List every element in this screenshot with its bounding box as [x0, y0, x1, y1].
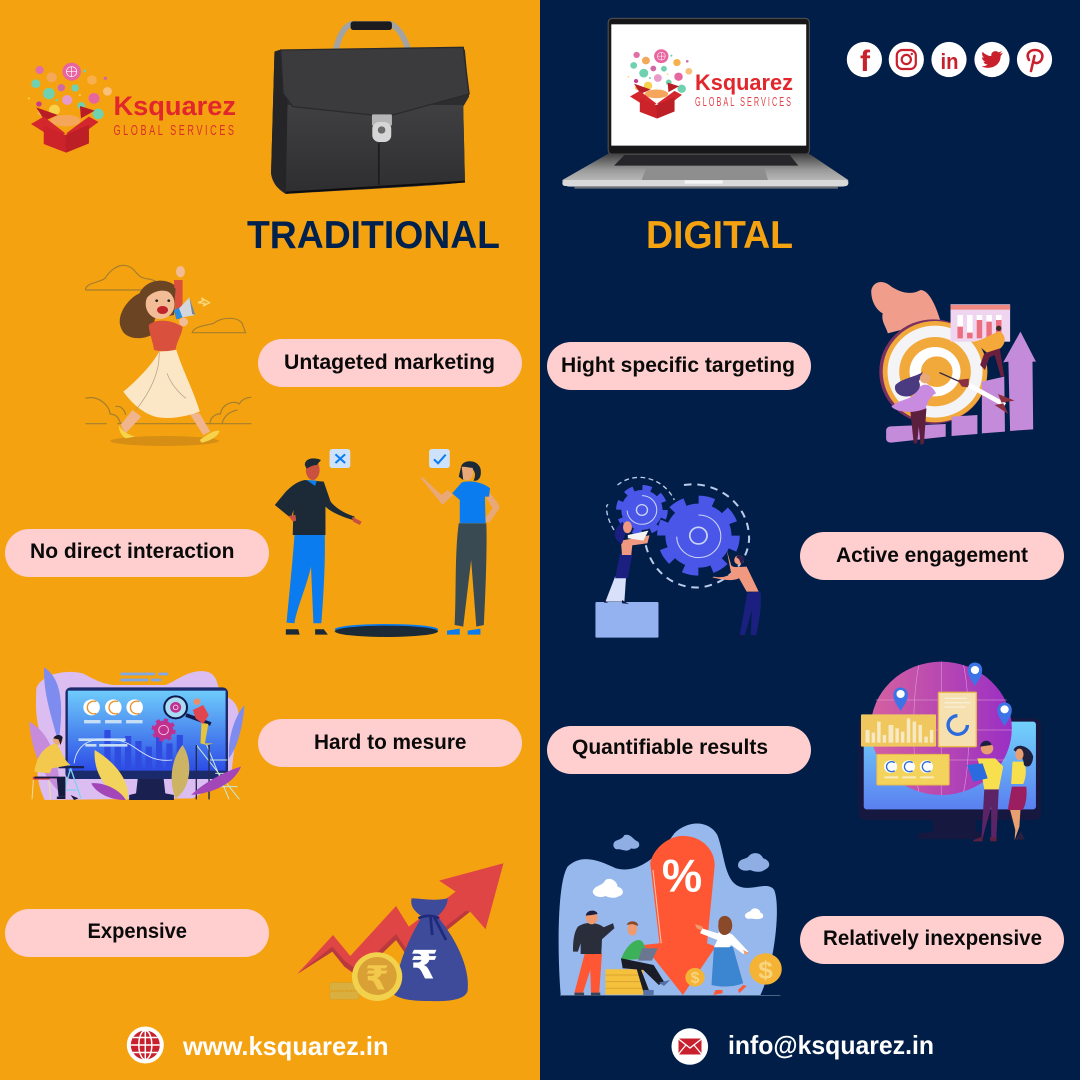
- pill: high specific targeting: [547, 342, 811, 390]
- percent sign: %: [662, 850, 702, 902]
- icon: linkedin: in: [940, 49, 958, 74]
- icon: mail: [672, 1028, 708, 1065]
- social icons: [847, 42, 1052, 78]
- illustration: target with bar chart: [871, 282, 1036, 445]
- icon: linkedin: [931, 42, 967, 77]
- website address: www.ksquarez.in: [182, 1031, 388, 1061]
- icon: logo box with bubbles: [28, 63, 112, 153]
- pill: untargeted marketing: Untageted marketing: [284, 351, 495, 374]
- dollar on large coin: $: [758, 957, 773, 984]
- panel: traditional background: [0, 0, 540, 1080]
- heading: traditional: TRADITIONAL: [247, 214, 500, 257]
- icon: facebook: f: [860, 45, 871, 78]
- heading: digital: DIGITAL: [646, 214, 793, 257]
- pill: untargeted marketing: [258, 339, 522, 387]
- icon: twitter: [974, 42, 1010, 77]
- pill: hard to measure: Hard to mesure: [314, 731, 466, 754]
- pill: expensive: [5, 909, 269, 957]
- pill: quantifiable results: [547, 726, 811, 774]
- pill: expensive: Expensive: [88, 920, 187, 943]
- laptop logo tagline: GLOBAL SERVICES: [695, 95, 793, 109]
- pill: hard to measure: [258, 719, 522, 767]
- icon: facebook: [847, 42, 882, 78]
- icon: globe: [127, 1026, 164, 1064]
- illustration: gears and people: [595, 477, 761, 638]
- laptop logo wordmark: Ksquarez: [695, 70, 793, 95]
- illustration: rising cost with rupee bag: [297, 863, 504, 1001]
- email address: info@ksquarez.in: [728, 1030, 934, 1060]
- rupee symbol on coin: ₹: [365, 959, 389, 997]
- dollar on small coin: $: [691, 970, 700, 987]
- pill: no direct interaction: No direct interaction: [30, 540, 235, 563]
- pill: no direct interaction: [5, 529, 269, 577]
- icon: laptop with logo: [562, 18, 848, 189]
- pill: active engagement: Active engagement: [836, 544, 1028, 567]
- rupee symbol on bag: ₹: [410, 943, 438, 988]
- illustration: monitor analytics: [29, 667, 245, 800]
- logo tagline: GLOBAL SERVICES: [114, 123, 236, 139]
- illustration: man and woman at a hole: [275, 449, 499, 637]
- pill: high specific targeting: Hight specific targeting: [561, 354, 795, 377]
- logo: Ksquarez: [28, 63, 236, 153]
- pill: relatively inexpensive: Relatively inexpensive: [823, 927, 1042, 950]
- icon: instagram: [889, 42, 924, 77]
- illustration: globe dashboard monitor: [859, 662, 1041, 841]
- illustration: discount arrow with people: [559, 824, 782, 995]
- pill: relatively inexpensive: [800, 916, 1064, 964]
- illustration: woman with megaphone: [85, 265, 251, 446]
- panel: digital background: [540, 0, 1080, 1080]
- icon: briefcase: [271, 21, 469, 194]
- logo wordmark: Ksquarez: [114, 91, 236, 121]
- icon: pinterest: [1017, 42, 1052, 77]
- pill: active engagement: [800, 532, 1064, 580]
- pill: quantifiable results: Quantifiable results: [572, 736, 768, 759]
